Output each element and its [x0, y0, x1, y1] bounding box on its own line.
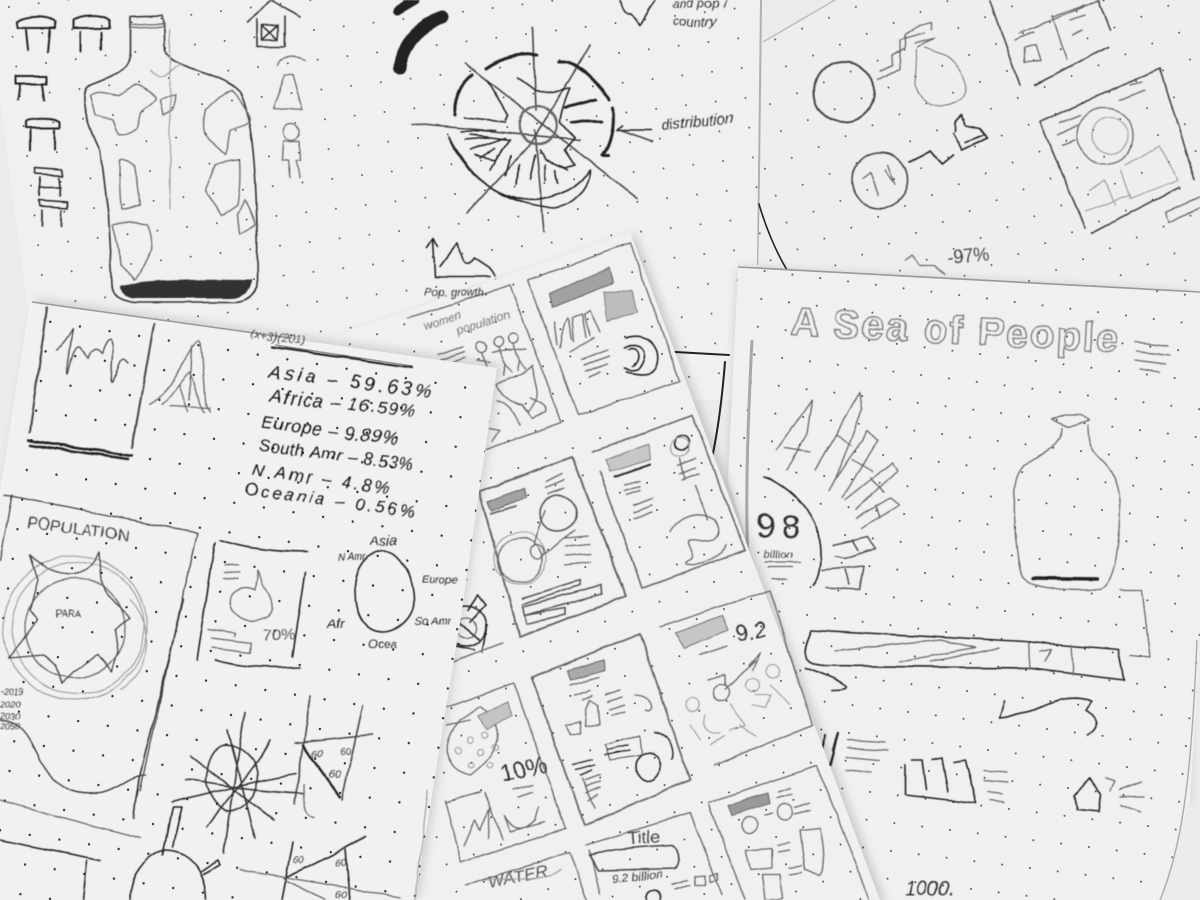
text block: population shares by region — [243, 362, 433, 522]
icon: water bottle with waterline — [1014, 415, 1150, 657]
thumbnail: title with bottle and 9.2 billion: Title — [627, 826, 662, 849]
thumbnail: woman population: population — [454, 307, 512, 338]
thumbnail: woman population — [408, 285, 562, 450]
thumbnail: map and text — [593, 415, 745, 588]
label: 97 percent and mini bottle: -97% — [946, 244, 990, 268]
thumbnail: water — [465, 852, 587, 900]
label: per capita country note — [620, 0, 728, 29]
label: 97 percent and mini bottle — [905, 244, 990, 275]
chart: fan of population petals — [764, 392, 900, 590]
icon: globe linked to small bottle — [852, 115, 988, 208]
chart: egg diagram with region labels: Europe — [422, 574, 457, 586]
number: 1000: 1000. — [905, 878, 955, 900]
thumbnail: bottles and globe — [531, 634, 690, 825]
chart: radial distribution wheel — [413, 28, 653, 232]
icons: stool sketches — [15, 16, 110, 226]
labels: years along timeline: 2020 — [0, 699, 20, 709]
thumbnail: drop field with percent — [445, 683, 566, 862]
text block: population shares by region: Oceania – 0.56% — [243, 479, 416, 522]
chart: radar triangle with 60 labels: 60 — [340, 747, 352, 758]
thumbnail: water: WATER — [487, 861, 549, 892]
labels: years along timeline: -2019 — [0, 686, 23, 696]
chart: lower radar fragment: 60 — [335, 858, 347, 869]
labels: years along timeline: 2030 — [0, 711, 20, 721]
chart: lower radar fragment: 60 — [293, 855, 305, 866]
shaded brush arcs — [398, 0, 443, 68]
header annotation: (x+3)(201) — [250, 326, 307, 348]
thumbnail: radial chart fragment — [432, 595, 503, 664]
labels: years along timeline: 2050 — [0, 721, 20, 731]
label: per capita country note: country — [673, 14, 717, 29]
text lines beside title — [1135, 342, 1170, 372]
chart: egg diagram with region labels: N Amr — [338, 552, 367, 563]
icon: house — [247, 0, 299, 47]
panel: lower-left sheet — [0, 299, 501, 900]
icon: circle with bottle neck — [130, 807, 220, 900]
panel: arc peeking behind middle sheet — [675, 352, 729, 458]
small tag — [1165, 197, 1200, 222]
small icons row — [818, 733, 1144, 812]
thumbnail: title with bottle and 9.2 billion: 9.2 billion — [611, 867, 663, 886]
thumbnail: radial icon with 70 percent: 70% — [263, 627, 295, 644]
chart: mountain population curve — [150, 340, 210, 412]
chart: lower radar fragment — [240, 837, 400, 900]
thumbnail: top right sheet top — [990, 0, 1110, 85]
text block: population shares by region: N Amr – 4.8% — [251, 460, 391, 498]
icon: factory smoke and flask — [273, 57, 305, 110]
thumbnail: circle and bars — [479, 457, 626, 637]
lower-left curve lines — [0, 800, 140, 900]
icon: linked globe and bottle — [814, 22, 965, 122]
thumbnail: POPULATION virus globe: POPULATION — [26, 514, 130, 545]
panel: top-left sketch sheet — [0, 0, 761, 400]
chart: population growth line — [425, 238, 495, 299]
chart: egg diagram with region labels: Asia — [369, 532, 397, 548]
panel: top-right sketch sheet — [758, 0, 1200, 310]
chart: egg diagram with region labels: Afr — [327, 616, 345, 631]
thumbnail: 9.2 crowd arrow: 9.2 — [734, 616, 768, 646]
panel: middle sheet of thumbnails — [330, 232, 885, 900]
text block: population shares by region: Africa – 16.59% — [269, 386, 417, 421]
right edge stub — [415, 790, 428, 900]
chart: radial star — [172, 712, 303, 853]
label: distribution: distribution — [661, 109, 735, 134]
chart: population growth line: Pop. growth — [425, 287, 484, 299]
text block: population shares by region: South Amr – 8.53% — [258, 436, 415, 474]
thumbnail: drop field with percent: 10% — [498, 751, 550, 788]
icon: person — [282, 124, 300, 178]
chart: radar triangle with 60 labels: 60 — [312, 749, 324, 760]
chart: egg diagram with region labels: Ocea — [368, 637, 397, 651]
thumbnail: 9.2 crowd arrow — [660, 590, 812, 765]
thumbnail: woman population: women — [422, 307, 463, 333]
big number: 9.8 billion: billion — [764, 549, 792, 561]
icon: world map water bottle — [84, 16, 257, 302]
thumbnail: radial icon with 70 percent — [197, 540, 307, 667]
thumbnail: top right sheet globe layout — [1040, 68, 1195, 233]
text block: population shares by region: Asia – 59.63% — [266, 362, 433, 403]
labels: years along timeline — [0, 600, 183, 818]
thumbnail: POPULATION virus globe: PARA — [55, 609, 82, 620]
chart: egg diagram with region labels — [327, 532, 457, 651]
stacked bar sketch — [805, 630, 1124, 735]
big number: 9.8 billion — [756, 508, 800, 580]
thumbnail: title with bottle and 9.2 billion — [587, 813, 722, 900]
big number: 9.8 billion: 98 — [756, 508, 800, 546]
thumbnail: POPULATION virus globe — [0, 495, 197, 790]
text block: population shares by region: Europe – 9.89% — [261, 412, 399, 449]
chart: radar triangle with 60 labels — [295, 697, 372, 817]
chart: radar triangle with 60 labels: 60 — [329, 769, 342, 781]
panel: right sheet with A Sea of People sketch — [728, 267, 1200, 900]
thumbnail: bars and pie — [528, 243, 680, 415]
chart: egg diagram with region labels: So Amr — [415, 616, 453, 628]
thumbnail: circles and panels — [708, 766, 870, 900]
title: A Sea of People: A Sea of People — [790, 300, 1119, 361]
thumbnail: heading rectangle with line chart — [28, 308, 154, 459]
